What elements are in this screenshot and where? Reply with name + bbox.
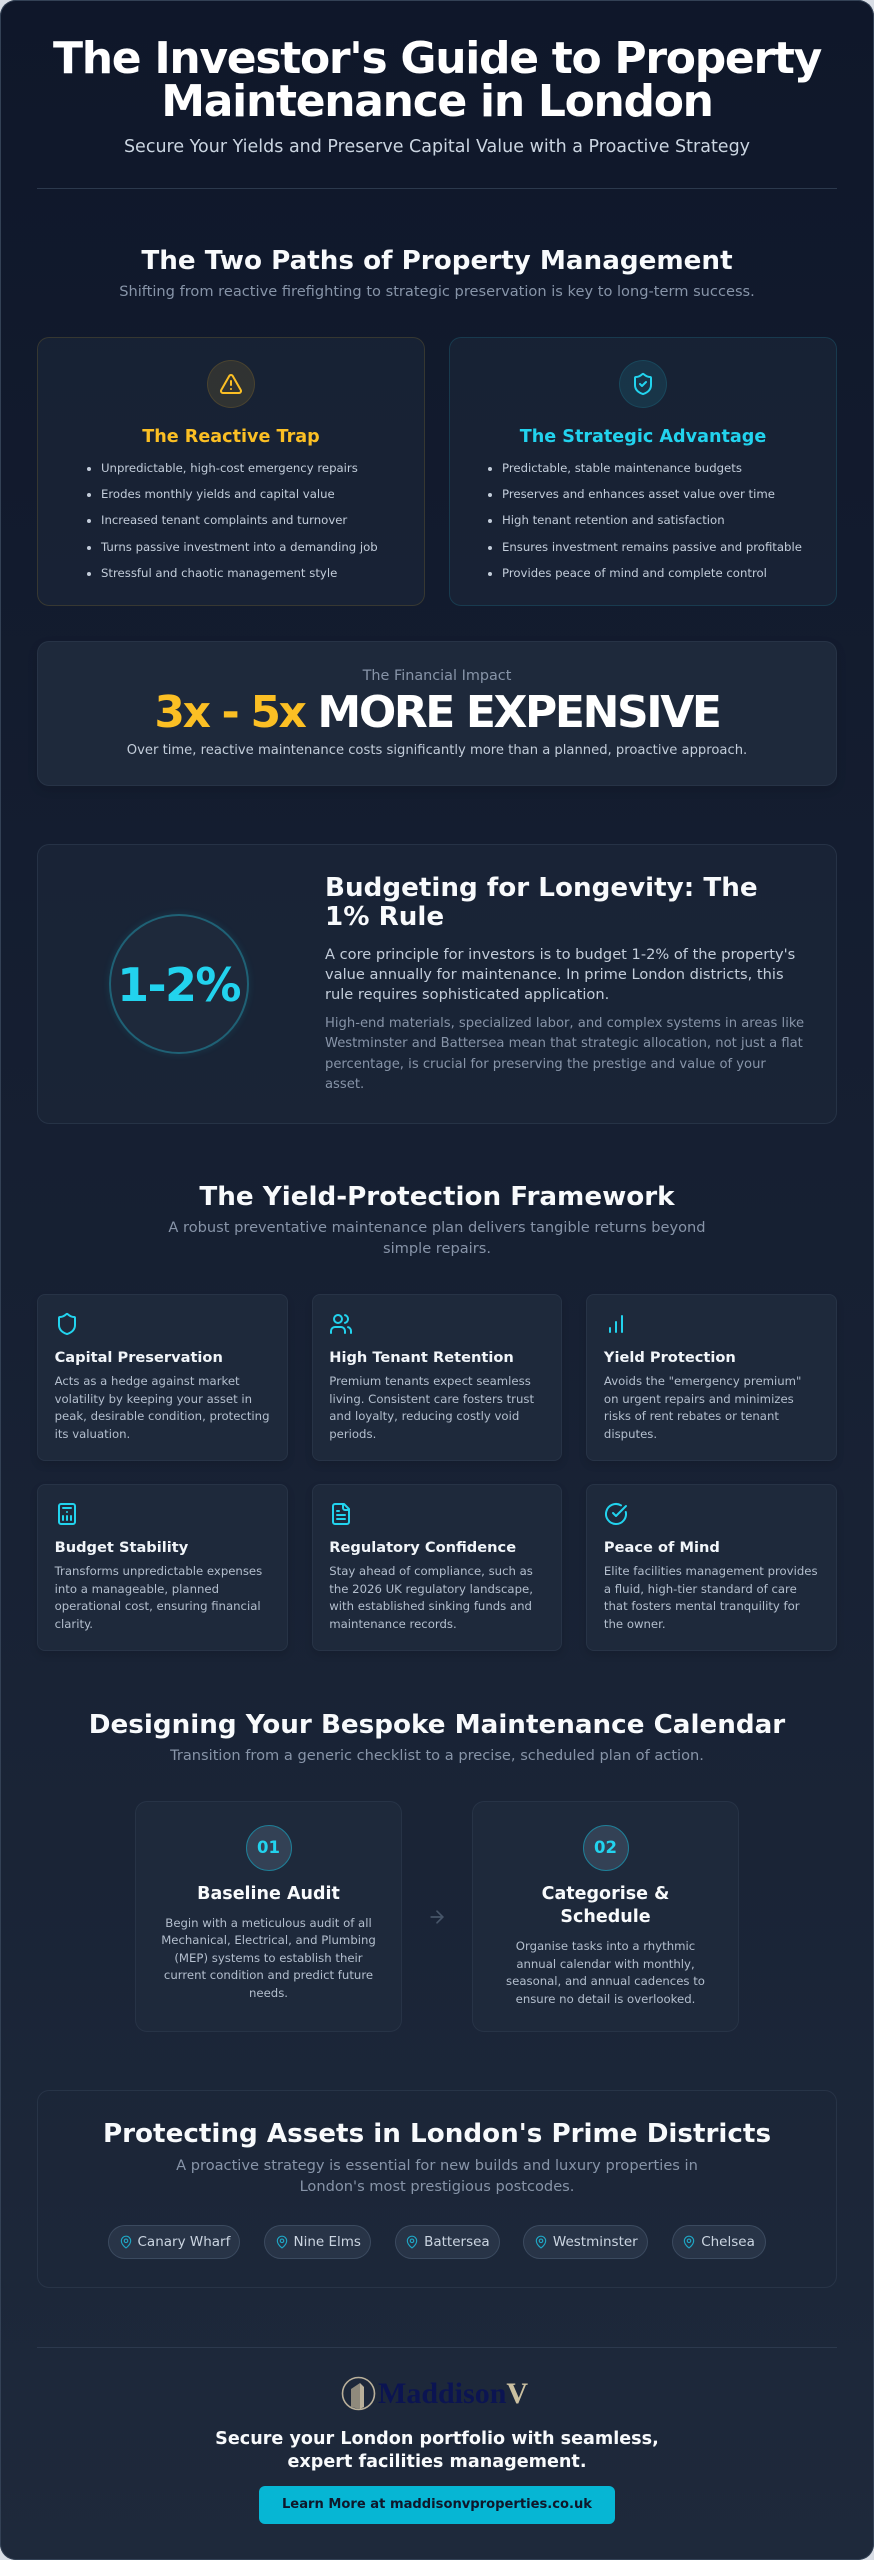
text: categorise and schedule: Organise tasks into a rhythmic — [516, 1939, 695, 1953]
list: strategic points: Preserves and enhances asset value over time — [502, 487, 775, 501]
pill: Westminster — [523, 2225, 648, 2259]
list: reactive points: Increased tenant complaints and turnover — [101, 513, 347, 527]
text: regulatory confidence: Stay ahead of compliance, such as — [329, 1564, 533, 1578]
text: baseline audit: current condition and predict future — [164, 1968, 373, 1982]
text: baseline audit: Mechanical, Electrical, and Plumbing — [161, 1933, 376, 1947]
text: yield protection — [604, 1374, 801, 1440]
text: capital preservation: peak, desirable condition, protecting — [55, 1409, 270, 1423]
heading: baseline audit: Baseline Audit — [197, 1884, 340, 1904]
icon: bar chart — [609, 1315, 623, 1333]
card: capital preservation — [37, 1294, 288, 1461]
text: core principle: A core principle for investors is to budget 1-2% of the property's — [325, 946, 795, 962]
text: strategic allocation: percentage, is crucial for preserving the prestige and value of your — [325, 1057, 766, 1072]
list: reactive points: Unpredictable, high-cost emergency repairs — [101, 461, 358, 475]
text: categorise and schedule: seasonal, and annual cadences to — [506, 1974, 705, 1988]
text: peace of mind: the owner. — [604, 1616, 666, 1630]
pill: Chelsea — [672, 2225, 766, 2259]
text: baseline audit — [161, 1916, 376, 2000]
note: financial impact: Over time, reactive maintenance costs significantly more than a planned, proactive approach. — [127, 743, 747, 758]
list: strategic points: Ensures investment remains passive and profitable — [502, 540, 802, 554]
text: regulatory confidence: with established sinking funds and — [329, 1599, 532, 1613]
subheading: yield-protection framework: A robust preventative maintenance plan delivers tangible returns beyond — [168, 1219, 706, 1236]
step number 02 — [582, 1825, 628, 1871]
text: regulatory confidence — [329, 1564, 533, 1630]
subheading: yield-protection framework — [168, 1219, 706, 1256]
icon: arrow right — [430, 1910, 444, 1924]
heading: categorise and schedule: Categorise & — [542, 1884, 669, 1904]
text: categorise and schedule: ensure no detail is overlooked. — [516, 1992, 695, 2006]
text: capital preservation: its valuation. — [55, 1426, 130, 1440]
heading: capital preservation: Capital Preservation — [55, 1349, 223, 1366]
text: strategic allocation: Westminster and Battersea mean that strategic allocation, not just a flat — [325, 1036, 803, 1051]
heading: reactive trap: The Reactive Trap — [142, 427, 320, 447]
pill: Canary Wharf — [108, 2225, 240, 2259]
step number 01: 01 — [257, 1838, 280, 1857]
panel: the strategic advantage — [449, 337, 837, 606]
text: core principle — [325, 946, 795, 1003]
subheading: prime districts — [176, 2157, 698, 2194]
text: categorise and schedule — [506, 1939, 705, 2006]
pill: Battersea: Battersea — [424, 2234, 490, 2250]
icon: shield — [58, 1312, 76, 1335]
heading: budgeting for longevity: 1% Rule — [325, 902, 444, 932]
heading: categorise and schedule — [542, 1884, 669, 1926]
text: regulatory confidence: the 2026 UK regulatory landscape, — [329, 1582, 533, 1596]
list: strategic points: High tenant retention and satisfaction — [502, 513, 725, 527]
subheading: two paths: Shifting from reactive firefighting to strategic preservation is key to long-term success. — [119, 283, 755, 300]
icon: calculator — [58, 1503, 76, 1525]
text: budget stability — [54, 1564, 262, 1630]
panel: budgeting rule — [37, 844, 837, 1124]
heading: strategic advantage: The Strategic Advantage — [520, 427, 766, 447]
heading: budget stability: Budget Stability — [55, 1539, 188, 1556]
text: strategic allocation: High-end materials, specialized labor, and complex systems in areas like — [325, 1016, 804, 1031]
heading: categorise and schedule: Schedule — [560, 1906, 651, 1926]
heading: peace of mind: Peace of Mind — [604, 1539, 720, 1556]
text: high tenant retention — [329, 1374, 534, 1440]
call to action text — [215, 2428, 659, 2472]
pill: Chelsea: Chelsea — [701, 2234, 755, 2250]
heading: high tenant retention: High Tenant Retention — [329, 1349, 514, 1366]
list: reactive points: Erodes monthly yields and capital value — [101, 487, 335, 501]
step number 02: 02 — [594, 1838, 617, 1857]
subtitle: Secure Your Yields and Preserve Capital Value with a Proactive Strategy — [124, 137, 750, 157]
text: high tenant retention: living. Consistent care fosters trust — [329, 1392, 534, 1406]
stat circle: 1-2%: 1-2% — [117, 958, 240, 1012]
text: strategic allocation: asset. — [325, 1077, 364, 1092]
text: categorise and schedule: annual calendar with monthly, — [516, 1956, 695, 1970]
heading: budgeting for longevity — [325, 872, 758, 932]
panel: prime districts — [37, 2090, 837, 2288]
heading: yield-protection framework: The Yield-Protection Framework — [199, 1182, 675, 1212]
subheading: prime districts: London's most prestigious postcodes. — [300, 2178, 574, 2194]
card: regulatory confidence — [312, 1484, 562, 1651]
text: capital preservation: volatility by keeping your asset in — [55, 1392, 252, 1406]
text: yield protection: on urgent repairs and minimizes — [604, 1392, 794, 1406]
card: high tenant retention — [312, 1294, 562, 1461]
icon: shield check — [619, 360, 667, 408]
list: strategic points — [488, 461, 802, 580]
text: yield protection: risks of rent rebates or tenant — [604, 1409, 779, 1423]
heading: two paths: The Two Paths of Property Management — [141, 246, 733, 276]
button: learn more: Learn More at maddisonvproperties.co.uk — [282, 2497, 592, 2512]
icon: check circle — [604, 1502, 627, 1525]
card: peace of mind — [586, 1484, 837, 1651]
text: high tenant retention: and loyalty, reducing costly void — [329, 1409, 519, 1423]
heading: regulatory confidence: Regulatory Confidence — [329, 1539, 516, 1556]
icon: document — [332, 1503, 350, 1525]
text: capital preservation — [54, 1374, 270, 1440]
text: budget stability: operational cost, ensuring financial — [55, 1599, 261, 1613]
icon: users — [330, 1314, 352, 1334]
text: peace of mind — [604, 1564, 818, 1630]
text: budget stability: into a manageable, planned — [55, 1582, 219, 1596]
pill: Battersea — [395, 2225, 500, 2259]
logo mark: building in circle — [342, 2376, 376, 2410]
text: core principle: value annually for maintenance. In prime London districts, this — [325, 966, 784, 983]
list: strategic points: Provides peace of mind and complete control — [502, 566, 767, 580]
pill: Westminster: Westminster — [553, 2234, 638, 2250]
text: baseline audit: (MEP) systems to establish their — [174, 1950, 363, 1964]
pill: Canary Wharf: Canary Wharf — [138, 2234, 230, 2250]
logo wordmark: MaddisonV — [378, 2377, 528, 2410]
text: budget stability: clarity. — [55, 1616, 93, 1630]
call to action text: expert facilities management. — [287, 2452, 587, 2472]
icon: warning triangle — [207, 360, 255, 408]
step number 01 — [246, 1825, 292, 1871]
heading: prime districts: Protecting Assets in London's Prime Districts — [103, 2119, 771, 2149]
heading: maintenance calendar: Designing Your Bespoke Maintenance Calendar — [89, 1710, 785, 1740]
list: reactive points: Turns passive investment into a demanding job — [101, 540, 378, 554]
text: regulatory confidence: maintenance records. — [329, 1616, 457, 1630]
text: baseline audit: Begin with a meticulous audit of all — [165, 1916, 372, 1930]
button: learn more — [259, 2486, 615, 2524]
text: yield protection: disputes. — [604, 1426, 657, 1440]
subheading: prime districts: A proactive strategy is essential for new builds and luxury properties in — [176, 2157, 698, 2174]
title — [53, 32, 822, 127]
title: The Investor's Guide to Property — [53, 32, 821, 84]
list: reactive points: Stressful and chaotic management style — [101, 566, 337, 580]
list: reactive points — [87, 461, 378, 580]
logo: MaddisonV — [342, 2376, 528, 2410]
subheading: maintenance calendar: Transition from a generic checklist to a precise, scheduled plan of action. — [170, 1747, 704, 1764]
title: Maintenance in London — [161, 76, 713, 127]
text: peace of mind: Elite facilities management provides — [604, 1564, 818, 1578]
call to action text: Secure your London portfolio with seamless, — [215, 2428, 659, 2448]
text: baseline audit: needs. — [249, 1986, 288, 2000]
text: capital preservation: Acts as a hedge against market — [55, 1374, 240, 1388]
text: strategic allocation — [325, 1016, 804, 1092]
card: yield protection — [586, 1294, 837, 1461]
text: peace of mind: that fosters mental tranquility for — [604, 1599, 800, 1613]
list: strategic points: Predictable, stable maintenance budgets — [502, 461, 742, 475]
pill: Nine Elms — [264, 2225, 371, 2259]
card: step 1 baseline audit — [135, 1801, 402, 2032]
text: yield protection: Avoids the "emergency premium" — [604, 1374, 801, 1388]
card: step 2 categorise and schedule — [472, 1801, 739, 2032]
heading: yield protection: Yield Protection — [604, 1349, 736, 1366]
text: high tenant retention: Premium tenants expect seamless — [329, 1374, 531, 1388]
panel: the reactive trap — [37, 337, 425, 606]
heading: budgeting for longevity: Budgeting for Longevity: The — [325, 872, 758, 902]
panel: financial impact — [37, 641, 837, 786]
card: budget stability — [37, 1484, 288, 1651]
subheading: yield-protection framework: simple repairs. — [383, 1240, 491, 1256]
text: budget stability: Transforms unpredictable expenses — [55, 1564, 262, 1578]
stat circle: 1-2% — [108, 914, 248, 1054]
stat: 3x to 5x more expensive: 3x - 5x MORE EXPENSIVE — [154, 687, 720, 738]
pill: Nine Elms: Nine Elms — [294, 2234, 361, 2250]
text: peace of mind: a fluid, high-tier standard of care — [604, 1582, 797, 1596]
text: core principle: rule requires sophisticated application. — [325, 986, 609, 1003]
text: high tenant retention: periods. — [329, 1426, 376, 1440]
label: financial impact: The Financial Impact — [363, 668, 511, 684]
